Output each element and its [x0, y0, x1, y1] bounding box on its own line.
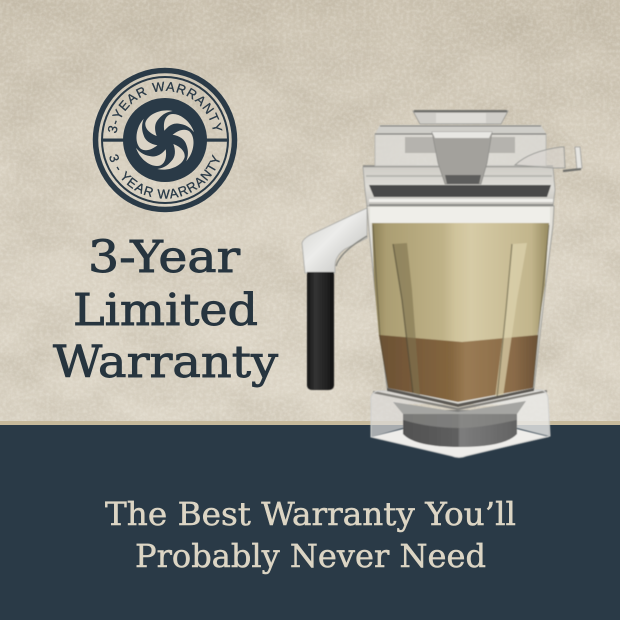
icon: upper lid and plug	[375, 110, 546, 184]
badge bottom text: 3 - YEAR WARRANTY	[110, 154, 220, 199]
badge top text: 3-YEAR WARRANTY	[108, 82, 222, 133]
heading: 3-Year Limited Warranty: Limited	[73, 285, 258, 336]
icon: handle	[302, 208, 367, 390]
blender container illustration	[302, 110, 582, 458]
heading: 3-Year Limited Warranty: 3-Year	[88, 232, 241, 283]
navy footer band	[0, 421, 620, 620]
icon: lower lid with gasket	[363, 166, 555, 206]
icon: lid latch	[515, 147, 582, 171]
tagline	[105, 495, 516, 575]
heading: 3-Year Limited Warranty	[53, 232, 278, 388]
textured stone background	[0, 0, 620, 425]
icon: jar body	[367, 206, 554, 407]
tagline: Probably Never Need	[135, 537, 486, 575]
tagline: The Best Warranty You’ll	[105, 495, 516, 533]
badge: 3-year warranty seal	[92, 68, 238, 212]
icon: blender base	[371, 390, 550, 458]
heading: 3-Year Limited Warranty: Warranty	[53, 337, 278, 388]
icon: blade swirl	[121, 98, 209, 182]
